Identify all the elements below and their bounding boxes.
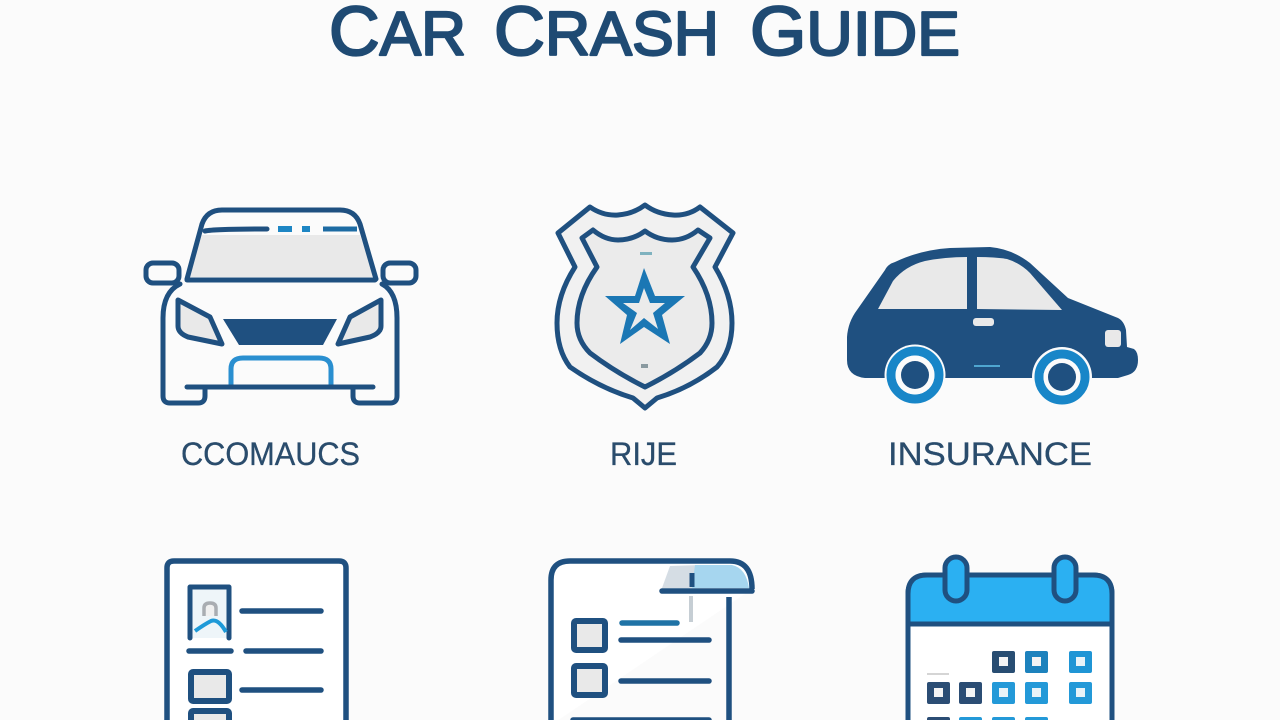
car body — [847, 247, 1138, 378]
icon: car front view — [146, 210, 416, 403]
license plate frame — [231, 358, 331, 385]
icon: checklist document — [551, 561, 752, 720]
hood line — [187, 278, 375, 282]
icon: police badge — [557, 205, 733, 408]
checkbox 1 — [574, 621, 605, 650]
label: badge: RIJE — [610, 436, 677, 472]
badge inner outline — [577, 230, 712, 387]
photo frame — [190, 587, 229, 638]
right page edge — [726, 597, 732, 720]
door handle — [973, 318, 994, 326]
text line 4 — [573, 717, 709, 720]
text line blue — [622, 620, 677, 626]
headlight — [1105, 330, 1121, 347]
caption line — [189, 648, 231, 654]
icon: car side view — [847, 247, 1138, 407]
page outline — [167, 561, 346, 720]
page outline — [551, 561, 752, 720]
grille — [223, 319, 337, 345]
text line 2 — [246, 648, 321, 654]
icon: calendar — [908, 557, 1112, 720]
calendar header — [908, 575, 1112, 624]
icon: document with photo — [167, 561, 346, 720]
body outline — [163, 284, 397, 403]
label: car front: CCOMAUCS — [181, 436, 360, 472]
right headlight — [338, 300, 381, 344]
right mirror — [383, 263, 416, 283]
left mirror — [146, 263, 179, 283]
text line 1 — [242, 608, 321, 614]
roof outline — [187, 210, 376, 279]
windshield — [188, 235, 374, 277]
badge outer outline — [557, 205, 733, 408]
calendar page — [908, 575, 1112, 720]
text line 3 — [621, 678, 709, 684]
left headlight — [178, 300, 222, 344]
text line 2 — [621, 637, 709, 643]
front wheel — [1032, 347, 1092, 407]
checkbox 1 — [191, 672, 229, 701]
windshield band with blue dashes — [205, 229, 357, 231]
bumper line — [187, 384, 373, 390]
title — [329, 0, 960, 70]
fold bar — [662, 588, 752, 594]
small bottom mark — [641, 364, 648, 368]
right ring — [1054, 557, 1076, 601]
left ring — [945, 557, 967, 601]
checkbox 2 — [574, 666, 605, 695]
label: insurance: INSURANCE — [888, 436, 1092, 472]
star — [605, 268, 685, 344]
text line 3 — [242, 687, 321, 693]
gray mark — [927, 673, 949, 675]
folded corner: gray side — [662, 565, 700, 588]
rear window — [878, 257, 967, 309]
pin shadow — [689, 596, 693, 622]
photo person head — [204, 603, 216, 616]
checkbox 2 — [191, 711, 229, 720]
small top mark — [640, 252, 652, 255]
date grid — [927, 651, 1092, 720]
front window — [977, 257, 1062, 310]
folded corner: blue side — [692, 565, 749, 588]
clip pin — [690, 573, 694, 587]
photo person shoulders — [195, 620, 226, 632]
rear wheel — [884, 344, 946, 406]
side trim — [974, 365, 1000, 367]
